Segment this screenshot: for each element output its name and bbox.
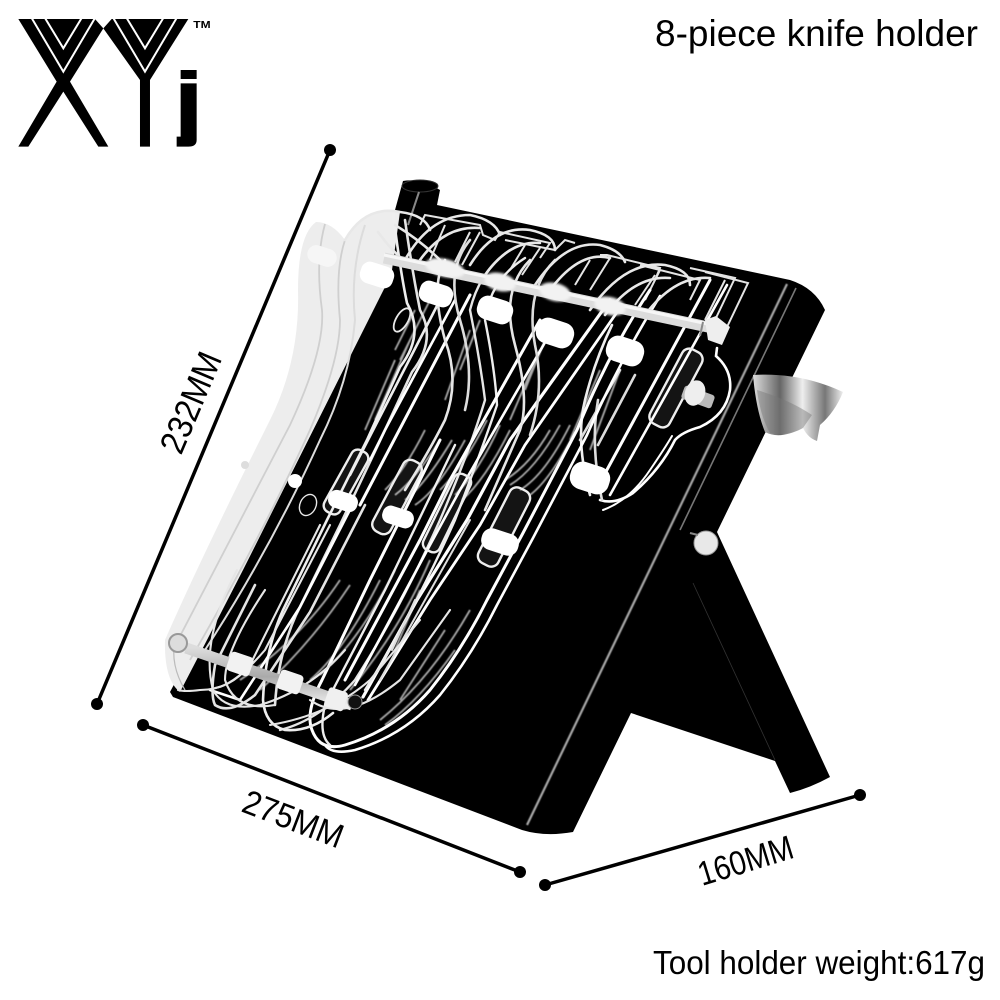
knife 4: handle-shaped slicer bbox=[210, 212, 470, 730]
weight note: Tool holder weight:617g bbox=[653, 944, 985, 981]
acrylic front panel bbox=[165, 211, 400, 692]
knife blade outlines bbox=[178, 211, 730, 752]
knife block: black board with stand bbox=[170, 180, 830, 834]
title: 8-piece knife holder bbox=[655, 13, 978, 54]
knife 3: wide blade bbox=[280, 250, 622, 730]
dimension: width 275MM: 275MM bbox=[237, 783, 349, 856]
knife 5: middle boning knife bbox=[345, 240, 555, 685]
back hook outlines of the acrylic slots bbox=[420, 215, 748, 327]
logo: XYj: TM bbox=[193, 20, 211, 31]
board side highlight bbox=[527, 284, 787, 825]
bottom steel rod bbox=[169, 634, 362, 712]
handle top arcs bbox=[296, 211, 710, 518]
rod end cap bbox=[705, 316, 730, 345]
faint blade reflections bbox=[240, 300, 620, 725]
top steel rod bbox=[384, 254, 730, 345]
white mounting pegs bbox=[241, 243, 647, 558]
dimension: depth 160MM: 160MM bbox=[693, 829, 798, 894]
stand hinge knob bbox=[690, 531, 718, 555]
logo: XYj bbox=[18, 18, 211, 147]
knife 2: long chef knife bbox=[310, 290, 660, 752]
top post bbox=[402, 180, 438, 192]
rear peg with cap bbox=[681, 377, 715, 409]
rod knots bbox=[423, 254, 628, 319]
dimension: height 232MM: 232MM bbox=[152, 346, 230, 459]
knife 1: paring knife with bulb bbox=[580, 280, 730, 510]
dimension: height 232MM bbox=[91, 144, 336, 710]
small plastic guards bbox=[321, 346, 705, 569]
dimension: width 275MM bbox=[137, 719, 526, 878]
dimension: depth 160MM bbox=[539, 789, 866, 894]
steel sharpener hook bbox=[753, 375, 843, 441]
lower left loops bbox=[178, 525, 450, 725]
